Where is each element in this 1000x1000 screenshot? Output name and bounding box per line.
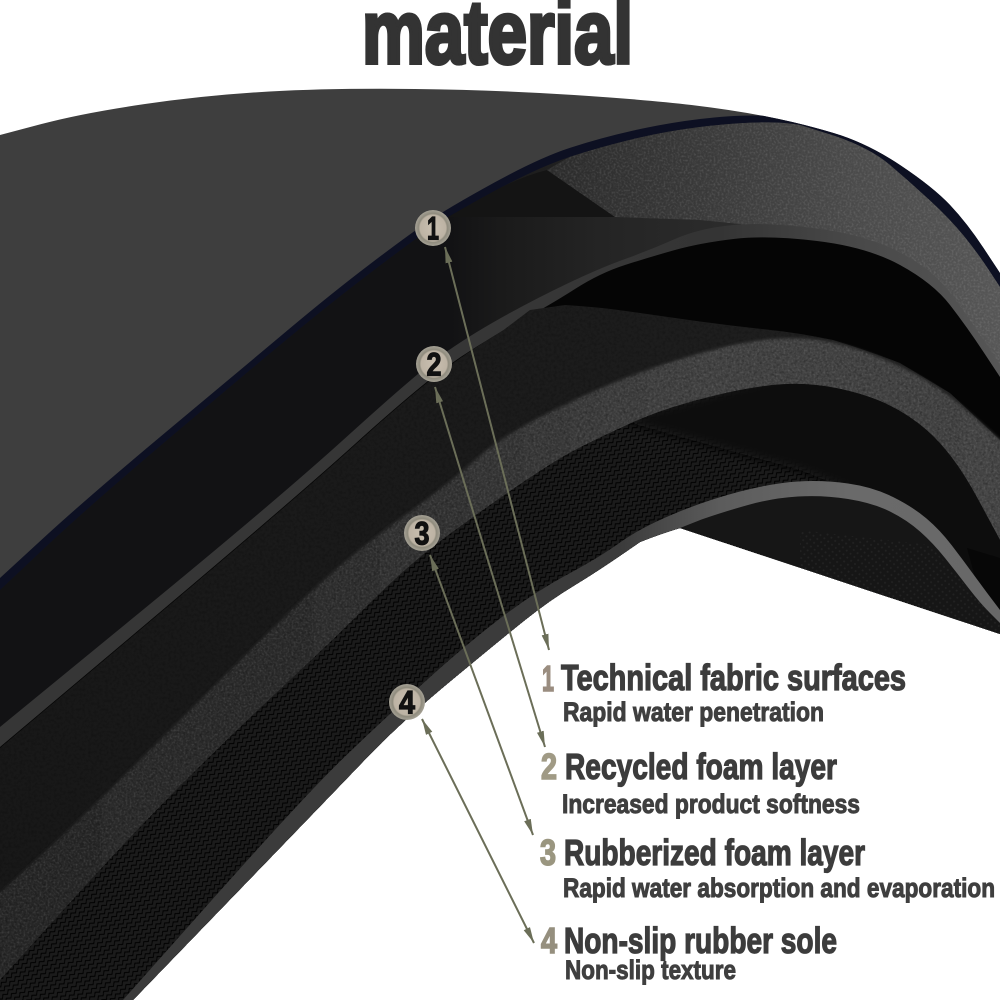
number 3: 3 <box>540 832 556 873</box>
arrow 4 <box>422 719 534 943</box>
badge 4 <box>389 684 425 720</box>
layer 2: recycled foam, dark band <box>0 305 1000 1000</box>
dark shaded part of the weave on the right <box>632 384 1000 576</box>
badge 2: 2 <box>426 346 442 382</box>
woven texture <box>0 384 1000 1000</box>
fabric underside dark facet <box>518 170 614 217</box>
arrow 1 <box>445 247 549 650</box>
number 4: 4 <box>541 920 557 961</box>
arrow 2 <box>435 387 545 747</box>
black wedge near right edge <box>967 548 1000 610</box>
layer 2 separator strip <box>0 224 1000 1000</box>
heading 1: Technical fabric surfaces <box>561 657 906 698</box>
non-slip rubber sole rim <box>123 481 1000 1000</box>
callout 3 <box>540 832 995 903</box>
layer 3: rubberized foam, lighter band <box>0 338 1000 1000</box>
heading 3: Rubberized foam layer <box>564 832 865 873</box>
layer 4: woven sole base <box>0 384 1000 1000</box>
description 2: Increased product softness <box>562 789 860 819</box>
callout 4 <box>541 920 837 985</box>
rubberized foam shading grain <box>0 330 1000 1000</box>
badge 1: 1 <box>427 210 439 246</box>
arrow 3 <box>430 555 533 835</box>
rubberized foam highlights <box>0 330 1000 1000</box>
badge 1 <box>415 210 451 246</box>
heading 4: Non-slip rubber sole <box>564 920 837 961</box>
badge 2 <box>416 346 452 382</box>
description 1: Rapid water penetration <box>563 697 824 727</box>
badge 3: 3 <box>414 516 430 552</box>
badge 4: 4 <box>399 684 415 720</box>
surface grain <box>548 122 1000 363</box>
number 1: 1 <box>542 658 554 699</box>
callout 2 <box>541 746 860 819</box>
description 4: Non-slip texture <box>565 955 736 985</box>
heading 2: Recycled foam layer <box>565 746 837 787</box>
badge 3 <box>404 515 440 552</box>
number 2: 2 <box>541 746 557 787</box>
sole underside dot texture <box>800 530 1000 634</box>
foam grain <box>0 300 1000 1000</box>
sole underside <box>680 496 1000 640</box>
textured lighter surface <box>548 122 1000 365</box>
callout 1 <box>542 657 906 727</box>
black cavity <box>0 237 1000 1000</box>
